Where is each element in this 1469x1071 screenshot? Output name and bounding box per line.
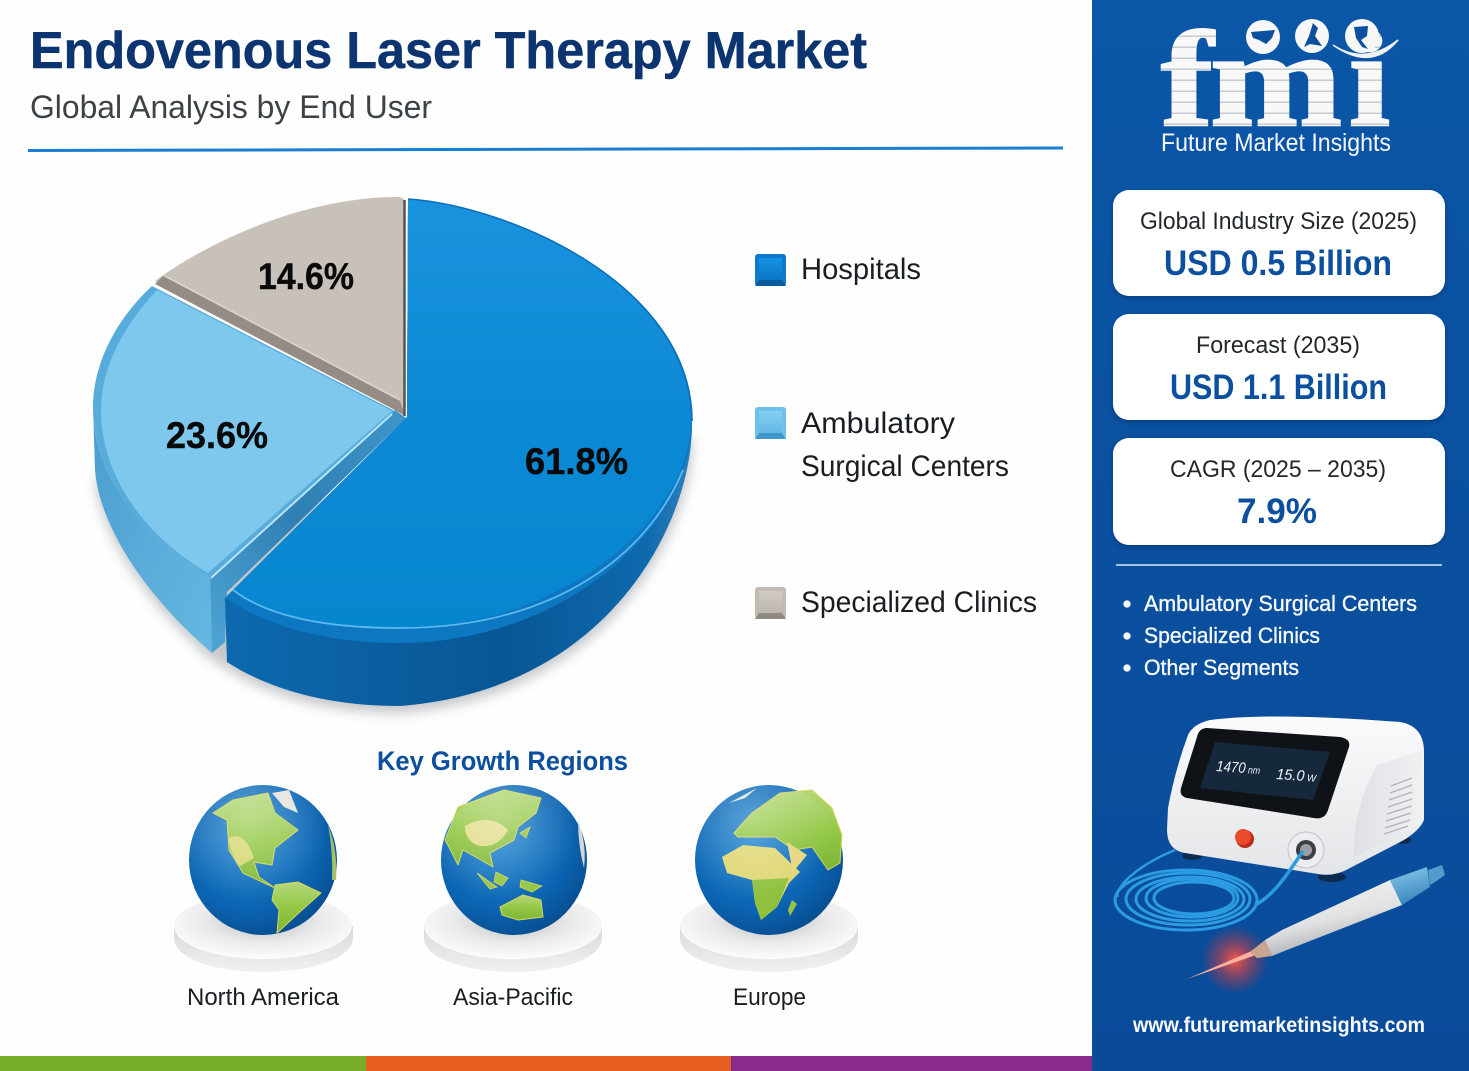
legend item: ambulatory surgical centers (755, 407, 1009, 483)
laser beam (1187, 950, 1256, 979)
bullet list: segments (1124, 591, 1417, 680)
device fiber port (1288, 832, 1324, 868)
handpiece (1250, 865, 1445, 958)
logo wordmark: f (1161, 5, 1215, 155)
card: cagr: CAGR (2025 – 2035) (1170, 456, 1386, 483)
icon: globe asia (441, 785, 587, 935)
bottom color bar (0, 1056, 1092, 1071)
device vents (1384, 778, 1412, 834)
region: europe (680, 785, 858, 1011)
pedestal (174, 893, 353, 972)
legend item: ambulatory surgical centers: Ambulatory (801, 407, 955, 440)
device feet (1182, 836, 1411, 882)
pie slice: hospitals 61.8% (225, 199, 692, 706)
pie slice: specialized clinics 14.6% (155, 197, 405, 416)
bullet list: segments: Other Segments (1144, 655, 1299, 680)
logo wordmark: i (1349, 5, 1390, 155)
legend item: hospitals: Hospitals (801, 253, 921, 286)
label: asia-pacific: Asia-Pacific (453, 984, 573, 1011)
card: cagr: 7.9% (1237, 492, 1317, 531)
icon: globe americas (189, 785, 337, 935)
subtitle: Global Analysis by End User (30, 89, 432, 125)
card: global industry size (1113, 190, 1445, 296)
page background (0, 0, 1092, 1071)
device body (1167, 716, 1424, 875)
icon: globe europe africa (695, 785, 843, 935)
bullet list: segments: Specialized Clinics (1144, 623, 1320, 648)
legend item: specialized clinics: Specialized Clinics (801, 586, 1037, 619)
card: forecast: Forecast (2035) (1196, 332, 1360, 359)
device red button (1235, 829, 1254, 848)
header rule (28, 148, 1063, 150)
region: asia-pacific (424, 785, 602, 1011)
panel: sidebar (1092, 0, 1469, 1071)
device readout: power: 15.0 W (1276, 766, 1318, 786)
card: cagr (1113, 438, 1445, 545)
device screen bezel (1181, 728, 1349, 818)
illustration: endovenous laser device (1115, 716, 1445, 994)
label: europe: Europe (733, 984, 806, 1011)
heading: key growth regions: Key Growth Regions (377, 746, 628, 776)
logo smile arc (1333, 40, 1398, 57)
pie slice: ambulatory surgical centers 23.6% (93, 286, 406, 653)
label: north america: North America (187, 984, 340, 1011)
sidebar divider (1116, 564, 1442, 566)
logo wordmark (1161, 5, 1390, 155)
pie chart: market share by end user (93, 197, 692, 713)
device display (1200, 742, 1330, 800)
card: global industry size: USD 0.5 Billion (1164, 244, 1392, 283)
card: forecast: USD 1.1 Billion (1170, 368, 1387, 407)
pedestal (424, 893, 602, 972)
pie ground shadow (95, 437, 692, 713)
logo wordmark: m (1210, 5, 1342, 155)
card: forecast (1113, 314, 1445, 420)
website url: www.futuremarketinsights.com (1132, 1014, 1425, 1037)
pie slice: hospitals 61.8%: 61.8% (525, 441, 628, 482)
logo tagline: Future Market Insights (1161, 129, 1391, 157)
fiber coil (1115, 850, 1303, 930)
legend item: ambulatory surgical centers: Surgical Centers (801, 450, 1009, 483)
pie slice: specialized clinics 14.6%: 14.6% (258, 256, 354, 297)
device side panel (1354, 750, 1423, 857)
logo: future market insights (1161, 5, 1398, 157)
card: global industry size: Global Industry Size (2025) (1140, 208, 1417, 235)
pedestal (680, 893, 858, 972)
logo globe circles (1246, 19, 1379, 54)
laser glow (1201, 926, 1269, 994)
bullet list: segments: Ambulatory Surgical Centers (1144, 591, 1417, 616)
pie slice: ambulatory surgical centers 23.6%: 23.6% (166, 415, 268, 456)
legend (755, 253, 1037, 619)
region: north america (174, 785, 353, 1011)
device readout: wavelength: 1470 nm (1216, 758, 1261, 778)
title: Endovenous Laser Therapy Market (30, 22, 867, 80)
